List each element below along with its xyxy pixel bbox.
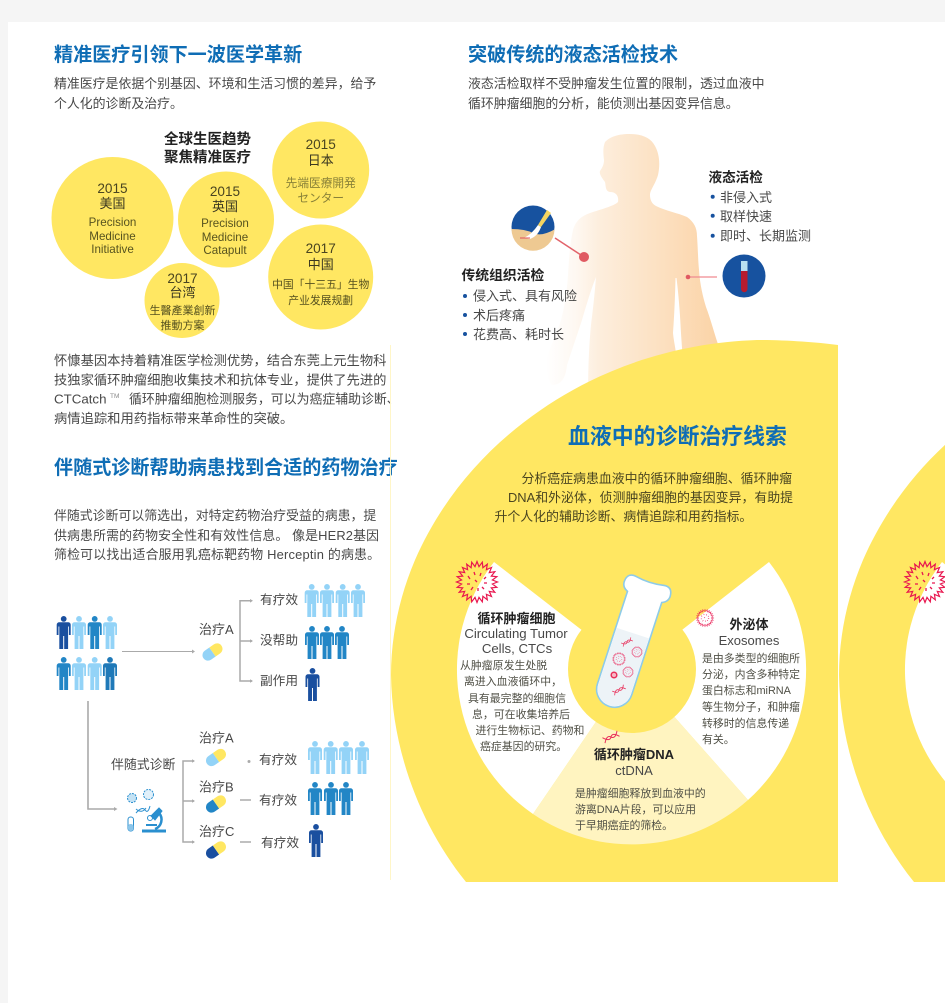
liquid biopsy list: 即时、长期监测 (720, 228, 811, 244)
text block: circulating tumor cells: 具有最完整的细胞信 (468, 691, 566, 705)
liquid biopsy text (468, 76, 764, 111)
bubble heading (164, 130, 251, 166)
company text: CTCatch (54, 392, 106, 406)
text block: exosomes: 等生物分子，和肿瘤 (702, 700, 800, 714)
liquid biopsy list (708, 169, 811, 244)
intro text: 个人化的诊断及治疗。 (54, 96, 183, 111)
text block: exosomes: 外泌体 (729, 617, 769, 632)
bubble: USA 2015: Precision (89, 216, 136, 229)
liquid biopsy text: 液态活检取样不受肿瘤发生位置的限制，透过血液中 (468, 76, 764, 91)
connector line (688, 276, 717, 278)
text block: ctDNA: 循环肿瘤DNA (594, 747, 675, 762)
text block: circulating tumor cells: 癌症基因的研究。 (480, 739, 567, 753)
outcome: no help (260, 626, 349, 659)
treatment option B: 有疗效 (259, 794, 297, 808)
heading: precision medicine: 精准医疗引领下一波医学革新 (54, 43, 302, 66)
treatment option A: 治疗A (199, 730, 234, 746)
bubble: USA 2015: Medicine (89, 230, 136, 243)
bubble: China 2017: 中国「十三五」生物 (272, 277, 369, 291)
tissue biopsy list: 术后疼痛 (473, 308, 525, 323)
icon: exosome (696, 609, 714, 627)
treatment option A (199, 730, 369, 774)
icon: pill light blue (200, 641, 225, 663)
text block: circulating tumor cells: 离进入血液循环中， (464, 674, 562, 688)
text block: circulating tumor cells: 息，可在收集培养后 (472, 707, 570, 721)
central hub (568, 630, 696, 733)
bubble heading: 全球生医趋势 (164, 130, 251, 148)
liquid biopsy list: 液态活检 (708, 169, 763, 185)
text block: exosomes: 蛋白标志和miRNA (702, 683, 792, 697)
intro text (54, 76, 376, 111)
bubble: China 2017: 产业发展规劃 (288, 293, 353, 307)
tissue biopsy list: 侵入式、具有风险 (473, 288, 577, 304)
company text: 技独家循环肿瘤细胞收集技术和抗体专业，提供了先进的 (54, 372, 386, 388)
bubble: China 2017 (268, 224, 373, 330)
companion diagnostic label: 伴随式诊断 (111, 757, 176, 772)
outcome: no help: 没帮助 (260, 634, 298, 648)
outcome: effective: 有疗效 (260, 593, 298, 607)
bubble: Taiwan 2017: 台湾 (169, 285, 196, 300)
text block: ctDNA: 是肿瘤细胞释放到血液中的 (575, 786, 706, 800)
patient group icons (57, 616, 117, 690)
treatment option C: 治疗C (199, 824, 234, 839)
liquid biopsy list: 非侵入式 (720, 190, 772, 205)
company text: TM (110, 393, 119, 400)
treatment option B: 治疗B (199, 780, 234, 794)
connector line (555, 238, 584, 257)
outcome: effective (260, 584, 365, 617)
tissue biopsy list: 花费高、耗时长 (473, 327, 564, 342)
heading: liquid biopsy: 突破传统的液态活检技术 (468, 43, 678, 66)
intro text: 精准医疗是依据个别基因、环境和生活习惯的差异，给予 (54, 76, 376, 91)
icon: next page tumor cell (904, 562, 945, 602)
section: precision medicine (52, 43, 400, 426)
marker dot (686, 275, 690, 279)
company text: 循环肿瘤细胞检测服务，可以为癌症辅助诊断、 (129, 392, 400, 406)
treatment option B (199, 780, 353, 815)
companion diagnostics text: 供病患所需的药物安全性和有效性信息。 像是HER2基因 (54, 528, 379, 543)
company text: 怀慷基因本持着精准医学检测优势，结合东莞上元生物科 (54, 352, 386, 368)
bubble: China 2017: 2017 (306, 241, 336, 256)
bubble: Japan 2015: センター (297, 192, 344, 205)
arrow to treatment A (122, 650, 195, 654)
text block: ctDNA: ctDNA (615, 763, 653, 778)
text block: circulating tumor cells: 从肿瘤原发生处脱 (460, 658, 547, 672)
text block: circulating tumor cells (456, 562, 584, 753)
text block: exosomes: 有关。 (702, 732, 735, 746)
bubble: Japan 2015 (272, 122, 369, 218)
section: liquid biopsy (462, 43, 811, 400)
blood clues text: 升个人化的辅助诊断、病情追踪和用药指标。 (494, 509, 752, 524)
liquid biopsy callout (686, 169, 811, 298)
tissue biopsy callout (462, 206, 589, 342)
text block: ctDNA: 于早期癌症的筛检。 (575, 818, 673, 832)
panel: blood clues yellow disc (391, 340, 838, 882)
fold line (390, 345, 392, 880)
arrow to companion diagnostic (88, 701, 118, 811)
text block: ctDNA: 游离DNA片段，可以应用 (575, 802, 696, 816)
blood clues text (494, 471, 793, 524)
text block: exosomes: 转移时的信息传递 (702, 716, 789, 730)
human body silhouette (547, 134, 722, 400)
marker dot (579, 252, 589, 262)
companion diagnostics text: 伴随式诊断可以筛选出，对特定药物治疗受益的病患，提 (54, 508, 376, 523)
sector: ctDNA (533, 717, 748, 844)
bubble: Japan 2015: 先端医療開発 (286, 176, 356, 190)
bubble: UK 2015: Medicine (202, 231, 248, 244)
treatment A label: 治疗A (199, 622, 234, 637)
bubble heading: 聚焦精准医疗 (164, 148, 251, 166)
bubble: Japan 2015: 2015 (306, 137, 336, 152)
liquid biopsy text: 循环肿瘤细胞的分析，能侦测出基因变异信息。 (468, 96, 739, 111)
outcome: side effect (260, 668, 320, 701)
company text (54, 352, 400, 426)
bubble: Taiwan 2017: 生醫產業創新 (150, 303, 216, 317)
blood clues text: 分析癌症病患血液中的循环肿瘤细胞、循环肿瘤 (522, 471, 792, 486)
text block: exosomes (696, 609, 800, 746)
tissue biopsy list: 传统组织活检 (462, 267, 544, 283)
text block: circulating tumor cells: Cells, CTCs (482, 641, 553, 656)
panel: next page yellow disc (839, 445, 945, 882)
icon: blood tube (722, 254, 766, 298)
blood clues text: DNA和外泌体，侦测肿瘤细胞的基因变异，有助提 (508, 490, 793, 505)
companion diagnostics text: 筛检可以找出适合服用乳癌标靶药物 Herceptin 的病患。 (54, 547, 380, 562)
text block: exosomes: 是由多类型的细胞所 (702, 651, 800, 665)
treatment option A: 有疗效 (259, 753, 297, 767)
bubble: UK 2015: Catapult (203, 244, 247, 257)
companion diagnostics text (54, 508, 380, 562)
icon: lab tools (128, 790, 166, 831)
text block: exosomes: Exosomes (719, 633, 780, 648)
icon: DNA strand (602, 731, 620, 743)
bubble: Taiwan 2017 (144, 263, 220, 338)
bubble: USA 2015: 美国 (99, 196, 126, 211)
sector: next page white ring (904, 562, 945, 782)
bubble: USA 2015: 2015 (97, 181, 128, 196)
branch arrows: outcomes (240, 599, 253, 683)
bubble: USA 2015 (52, 157, 174, 279)
bubble: UK 2015 (178, 172, 274, 268)
treatment option C (199, 824, 323, 861)
bubble: UK 2015: 2015 (210, 184, 240, 199)
bubble: Japan 2015: 日本 (308, 153, 334, 168)
text block: circulating tumor cells: Circulating Tumor (464, 626, 568, 641)
bubble: Taiwan 2017: 2017 (167, 271, 198, 286)
sector: exosomes (674, 562, 806, 800)
bubble: Taiwan 2017: 推動方案 (160, 318, 204, 332)
icon: scalpel (511, 206, 554, 251)
text block: circulating tumor cells: 进行生物标记、药物和 (476, 723, 584, 737)
text block: circulating tumor cells: 循环肿瘤细胞 (477, 611, 556, 626)
company text: 病情追踪和用药指标带来革命性的突破。 (54, 410, 293, 426)
icon: tumor cell (456, 562, 498, 602)
liquid biopsy list: 取样快速 (720, 209, 772, 224)
text block: ctDNA (575, 731, 706, 832)
section: companion diagnostics (54, 456, 398, 861)
heading: blood clues: 血液中的诊断治疗线索 (568, 424, 787, 449)
bracket: treatments (183, 759, 195, 844)
sector: circulating tumor cells (456, 562, 596, 814)
bubble: UK 2015: Precision (201, 217, 249, 230)
heading: companion diagnostics: 伴随式诊断帮助病患找到合适的药物治疗 (54, 456, 398, 479)
outcome: side effect: 副作用 (260, 674, 298, 688)
bubble: UK 2015: 英国 (212, 199, 238, 214)
bubble: USA 2015: Initiative (91, 243, 134, 256)
bubble: China 2017: 中国 (308, 257, 334, 272)
icon: test tube (586, 573, 673, 714)
treatment option C: 有疗效 (261, 836, 299, 850)
text block: exosomes: 分泌，内含多种特定 (702, 667, 800, 681)
tissue biopsy list (462, 267, 577, 342)
